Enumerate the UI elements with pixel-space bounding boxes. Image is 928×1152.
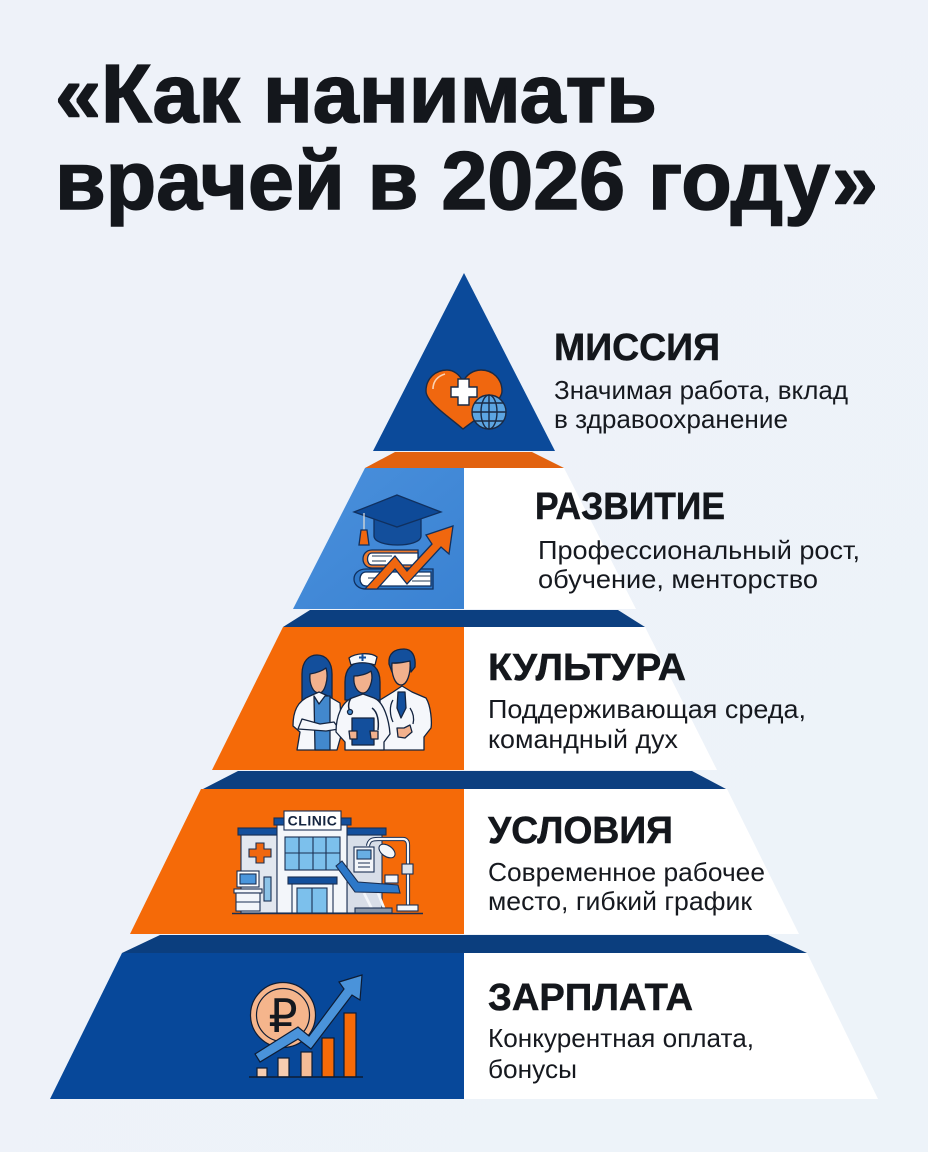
title (55, 47, 878, 227)
band: orange (365, 452, 564, 468)
mission text (554, 327, 848, 434)
conditions text: место, гибкий график (488, 886, 753, 916)
pyramid tier: culture (212, 627, 717, 770)
doctor right (380, 686, 431, 750)
conditions text: УСЛОВИЯ (488, 810, 673, 852)
band: navy lower (122, 935, 807, 953)
title: «Как нанимать (55, 47, 657, 140)
development text: Профессиональный рост, (538, 535, 860, 565)
icon: ruble coin and growth chart (249, 975, 363, 1077)
salary text: ЗАРПЛАТА (488, 977, 693, 1019)
culture text: командный дух (488, 724, 678, 754)
icon: clinic building and dental chair (232, 811, 423, 914)
pyramid tier: development (293, 468, 636, 609)
mission text: МИССИЯ (554, 327, 720, 369)
clinic sign: CLINIC (288, 812, 337, 828)
development text: обучение, менторство (538, 564, 818, 594)
icon: graduation cap, books and arrow (354, 495, 453, 589)
mission text: в здравоохранение (554, 404, 788, 434)
pyramid tier: salary (50, 953, 878, 1099)
culture text: Поддерживающая среда, (488, 694, 806, 724)
band: navy upper (283, 610, 645, 627)
icon: ruble coin and growth chart: ₽ (268, 989, 298, 1043)
development text: РАЗВИТИЕ (535, 486, 725, 528)
nurse center (345, 662, 380, 700)
icon: heart with cross and globe (426, 370, 506, 429)
mission text: Значимая работа, вклад (554, 375, 848, 405)
salary text: Конкурентная оплата, (488, 1023, 754, 1053)
culture text: КУЛЬТУРА (488, 647, 686, 689)
title: врачей в 2026 году» (55, 134, 878, 227)
doctor left (302, 655, 332, 700)
conditions text (488, 810, 765, 916)
icon: medical team (293, 649, 431, 750)
salary text (488, 977, 754, 1084)
band: navy middle (203, 771, 726, 789)
salary text: бонусы (488, 1054, 577, 1084)
pyramid tier: mission (373, 273, 555, 451)
conditions text: Современное рабочее (488, 857, 765, 887)
development text (535, 486, 860, 594)
culture text (488, 647, 806, 754)
pyramid tier: conditions (130, 789, 799, 934)
